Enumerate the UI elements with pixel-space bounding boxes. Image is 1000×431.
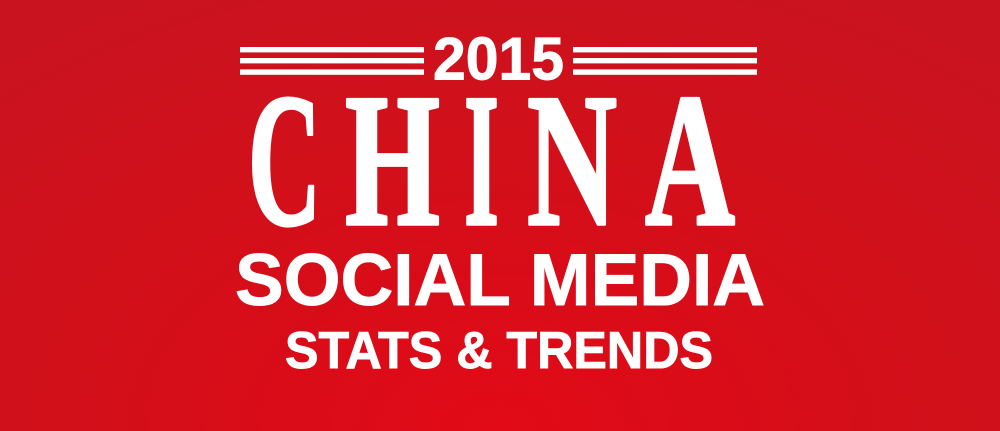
letter A: A (645, 56, 735, 266)
title: CHINA (248, 56, 735, 266)
year heading: 2015 (433, 26, 564, 92)
letter H: H (345, 56, 440, 266)
letter C: C (248, 56, 321, 266)
title: CHINA: I (464, 56, 499, 266)
right triple rule (573, 47, 757, 75)
letter N: N (527, 56, 617, 266)
subtitle: stats and trends: STATS & TRENDS (285, 322, 713, 380)
left triple rule (240, 47, 424, 75)
subtitle: social media: SOCIAL MEDIA (235, 240, 765, 321)
